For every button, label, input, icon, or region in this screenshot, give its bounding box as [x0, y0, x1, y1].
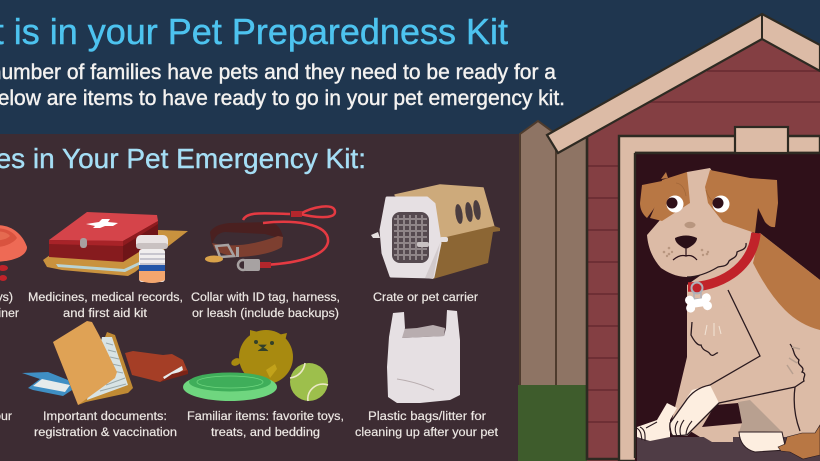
caption: collar: Collar with ID tag, harness, — [191, 290, 340, 304]
caption: medicines: Medicines, medical records, — [28, 290, 183, 304]
icon: collar and leash — [205, 206, 335, 271]
caption: medicines — [28, 290, 183, 320]
caption: collar: or leash (include backups) — [192, 306, 339, 320]
icon: tennis ball — [290, 363, 328, 401]
icon: plastic bag — [387, 310, 460, 403]
dog body — [672, 233, 820, 440]
eyes — [666, 196, 684, 212]
caption: food and water — [0, 290, 19, 320]
caption: collar — [191, 290, 340, 320]
icon: documents — [22, 321, 188, 405]
back paw — [739, 432, 786, 452]
icon: first aid kit — [43, 212, 188, 283]
bone tag — [684, 293, 713, 313]
front leg right — [670, 290, 795, 436]
caption: documents: Important documents: — [43, 409, 167, 423]
caption: familiar items: Familiar items: favorite toys, — [187, 409, 344, 423]
nose and mouth — [675, 236, 697, 249]
tail — [778, 425, 820, 459]
dog head — [647, 168, 754, 277]
ears and patches — [650, 172, 690, 221]
icon: toy cat — [230, 330, 293, 384]
caption: documents: registration & vaccination — [34, 425, 177, 439]
icon: food bowl — [0, 225, 27, 281]
caption: crate: Crate or pet carrier — [373, 290, 478, 304]
gap between legs — [702, 403, 745, 427]
front paw left — [637, 403, 677, 441]
chest fur — [691, 322, 718, 355]
caption: plastic bags — [355, 409, 499, 439]
panel: supplies background — [0, 134, 520, 461]
caption: familiar items — [187, 409, 344, 439]
caption: medicines: and first aid kit — [63, 306, 148, 320]
grass — [518, 385, 588, 461]
icon: pet crate — [371, 185, 500, 279]
caption: plastic bags: cleaning up after your pet — [355, 425, 499, 439]
intro text — [0, 61, 565, 110]
fence — [520, 121, 587, 386]
caption: plastic bags: Plastic bags/litter for — [368, 409, 486, 423]
caption: familiar items: treats, and bedding — [211, 425, 320, 439]
dog house — [547, 14, 820, 461]
caption: documents — [34, 409, 177, 439]
icon: frisbee — [183, 372, 277, 401]
collar — [688, 233, 756, 287]
illustration: dog — [637, 168, 820, 459]
roof — [547, 14, 820, 153]
